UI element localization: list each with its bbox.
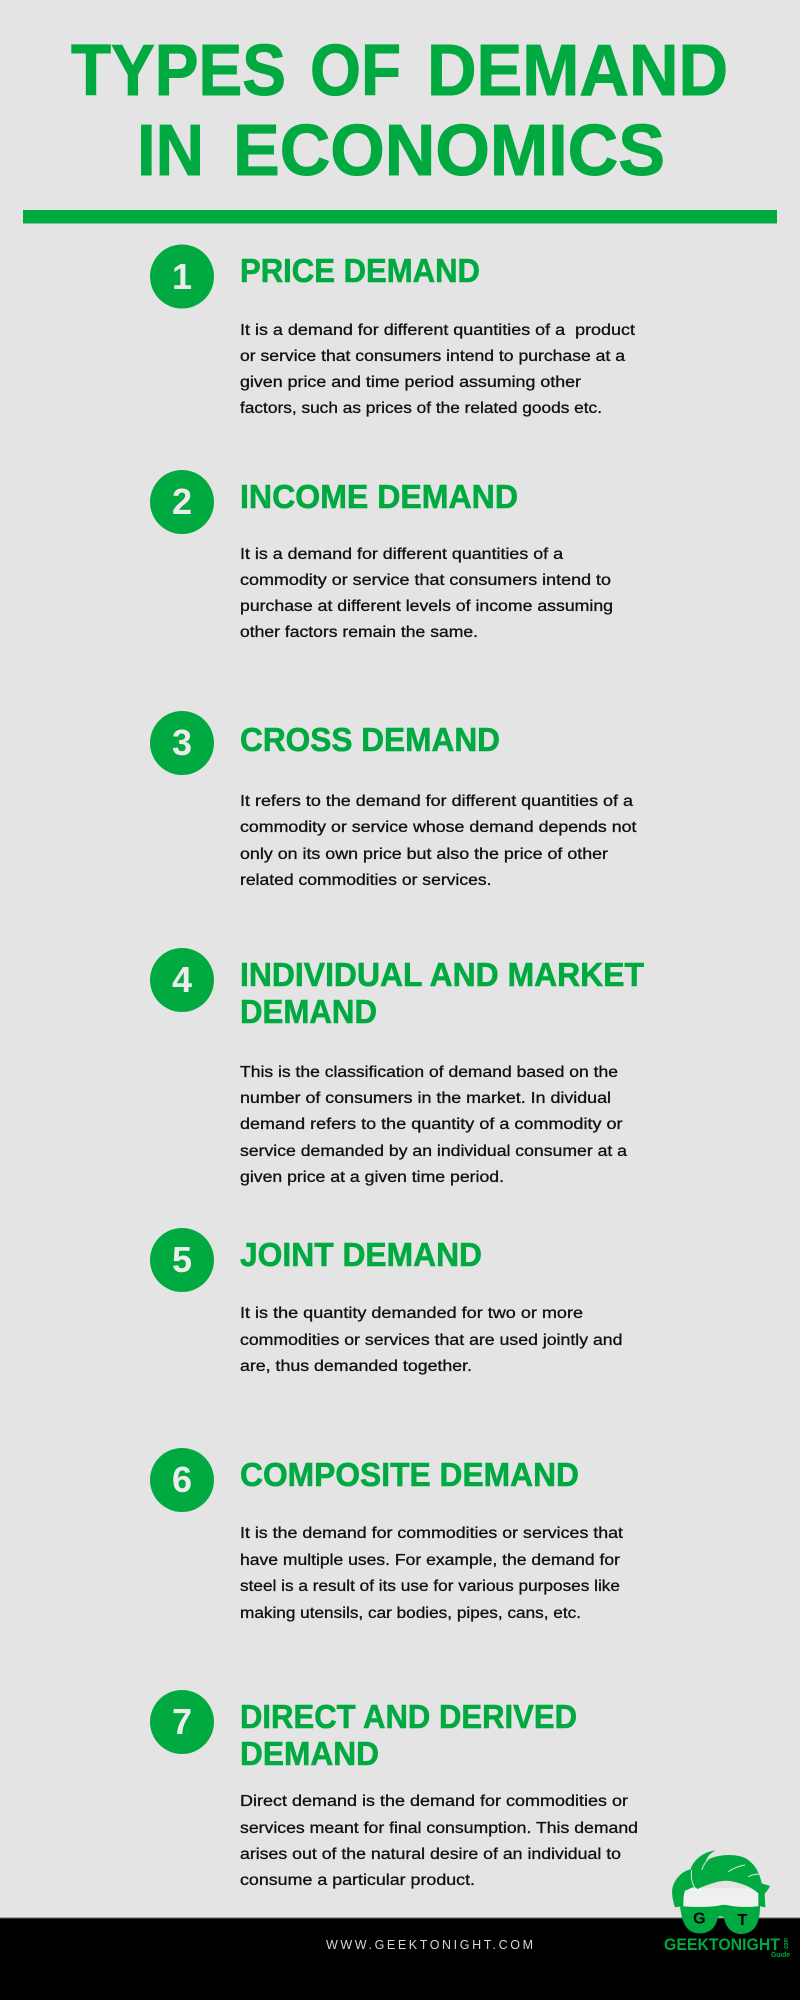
text block: cross demand: related commodities or services. <box>240 872 492 889</box>
title: DEMAND <box>427 31 728 111</box>
icon: geektonight logo <box>664 1850 790 1959</box>
text block: individual and market demand: demand refers to the quantity of a commodity or <box>240 1116 622 1133</box>
title: ECONOMICS <box>233 111 665 191</box>
number badge 2 <box>150 470 214 534</box>
number badge 4 <box>150 948 214 1012</box>
number badge 1: 1 <box>172 256 192 297</box>
text block: composite demand: steel is a result of its use for various purposes like <box>240 1578 620 1595</box>
text block: cross demand: It refers to the demand for different quantities of a <box>240 793 633 810</box>
title: OF <box>310 31 401 111</box>
text block: price demand: It is a demand for different quantities of a product <box>240 322 636 339</box>
text block: price demand <box>240 322 636 417</box>
title: TYPES <box>71 31 286 111</box>
footer band <box>0 1918 800 2000</box>
text block: individual and market demand: number of consumers in the market. In dividual <box>240 1090 611 1107</box>
text block: income demand <box>240 546 613 641</box>
text block: individual and market demand: This is the classification of demand based on the <box>240 1064 618 1081</box>
text block: joint demand: It is the quantity demanded for two or more <box>240 1305 583 1322</box>
heading: direct and derived demand: DIRECT AND DERIVED <box>240 1698 577 1735</box>
text block: composite demand: It is the demand for commodities or services that <box>240 1525 624 1542</box>
text block: income demand: It is a demand for different quantities of a <box>240 546 563 563</box>
text block: direct and derived demand: consume a particular product. <box>240 1872 475 1889</box>
text block: individual and market demand <box>240 1064 627 1186</box>
panel: 4 individual and market demand <box>150 948 644 1186</box>
number badge 6 <box>150 1448 214 1512</box>
number badge 3: 3 <box>172 722 192 763</box>
text block: joint demand <box>240 1305 622 1375</box>
panel: 6 composite demand <box>150 1448 624 1622</box>
panel: 7 direct and derived demand <box>150 1690 638 1889</box>
heading: individual and market demand: INDIVIDUAL AND MARKET <box>240 956 644 993</box>
text block: composite demand <box>240 1525 624 1622</box>
text block: individual and market demand: given price at a given time period. <box>240 1169 504 1186</box>
icon: geektonight logo: GEEKTONIGHT <box>664 1935 781 1954</box>
number badge 7: 7 <box>172 1701 192 1742</box>
heading: joint demand: JOINT DEMAND <box>240 1236 482 1273</box>
text block: individual and market demand: service demanded by an individual consumer at a <box>240 1143 627 1160</box>
icon: geektonight logo: Guide <box>771 1952 790 1959</box>
text block: cross demand: only on its own price but also the price of other <box>240 846 608 863</box>
text block: cross demand: commodity or service whose demand depends not <box>240 819 637 836</box>
icon: geektonight logo: T <box>737 1912 747 1929</box>
number badge 4: 4 <box>172 959 192 1000</box>
heading: composite demand: COMPOSITE DEMAND <box>240 1456 579 1493</box>
panel: 3 cross demand <box>150 711 637 889</box>
panel: 2 income demand <box>150 470 613 641</box>
text block: composite demand: have multiple uses. For example, the demand for <box>240 1552 620 1569</box>
heading: individual and market demand <box>240 956 644 1030</box>
footer url: WWW.GEEKTONIGHT.COM <box>326 1938 533 1952</box>
heading: income demand: INCOME DEMAND <box>240 478 518 515</box>
number badge 5: 5 <box>172 1239 192 1280</box>
text block: income demand: commodity or service that consumers intend to <box>240 572 611 589</box>
number badge 1 <box>150 244 214 308</box>
text block: price demand: factors, such as prices of the related goods etc. <box>240 400 602 417</box>
number badge 2: 2 <box>172 481 192 522</box>
text block: price demand: given price and time period assuming other <box>240 374 581 391</box>
number badge 3 <box>150 711 214 775</box>
icon: geektonight logo: .com <box>783 1938 790 1950</box>
panel: 5 joint demand <box>150 1228 622 1375</box>
text block: income demand: purchase at different levels of income assuming <box>240 598 613 615</box>
number badge 5 <box>150 1228 214 1292</box>
text block: income demand: other factors remain the same. <box>240 624 478 641</box>
text block: joint demand: commodities or services that are used jointly and <box>240 1332 622 1349</box>
title divider bar <box>23 210 777 224</box>
text block: direct and derived demand: services meant for final consumption. This demand <box>240 1820 638 1837</box>
heading: price demand: PRICE DEMAND <box>240 252 480 289</box>
panel: 1 price demand <box>150 244 636 417</box>
title <box>71 31 728 191</box>
text block: direct and derived demand: arises out of the natural desire of an individual to <box>240 1846 621 1863</box>
title: IN <box>137 111 204 191</box>
heading: individual and market demand: DEMAND <box>240 993 377 1030</box>
heading: direct and derived demand <box>240 1698 577 1772</box>
text block: composite demand: making utensils, car bodies, pipes, cans, etc. <box>240 1605 581 1622</box>
text block: direct and derived demand: Direct demand is the demand for commodities or <box>240 1793 628 1810</box>
text block: cross demand <box>240 793 637 889</box>
heading: direct and derived demand: DEMAND <box>240 1735 379 1772</box>
number badge 6: 6 <box>172 1459 192 1500</box>
icon: geektonight logo: G <box>693 1911 706 1928</box>
text block: joint demand: are, thus demanded together. <box>240 1358 472 1375</box>
number badge 7 <box>150 1690 214 1754</box>
text block: direct and derived demand <box>240 1793 638 1889</box>
heading: cross demand: CROSS DEMAND <box>240 721 500 758</box>
text block: price demand: or service that consumers intend to purchase at a <box>240 348 625 365</box>
